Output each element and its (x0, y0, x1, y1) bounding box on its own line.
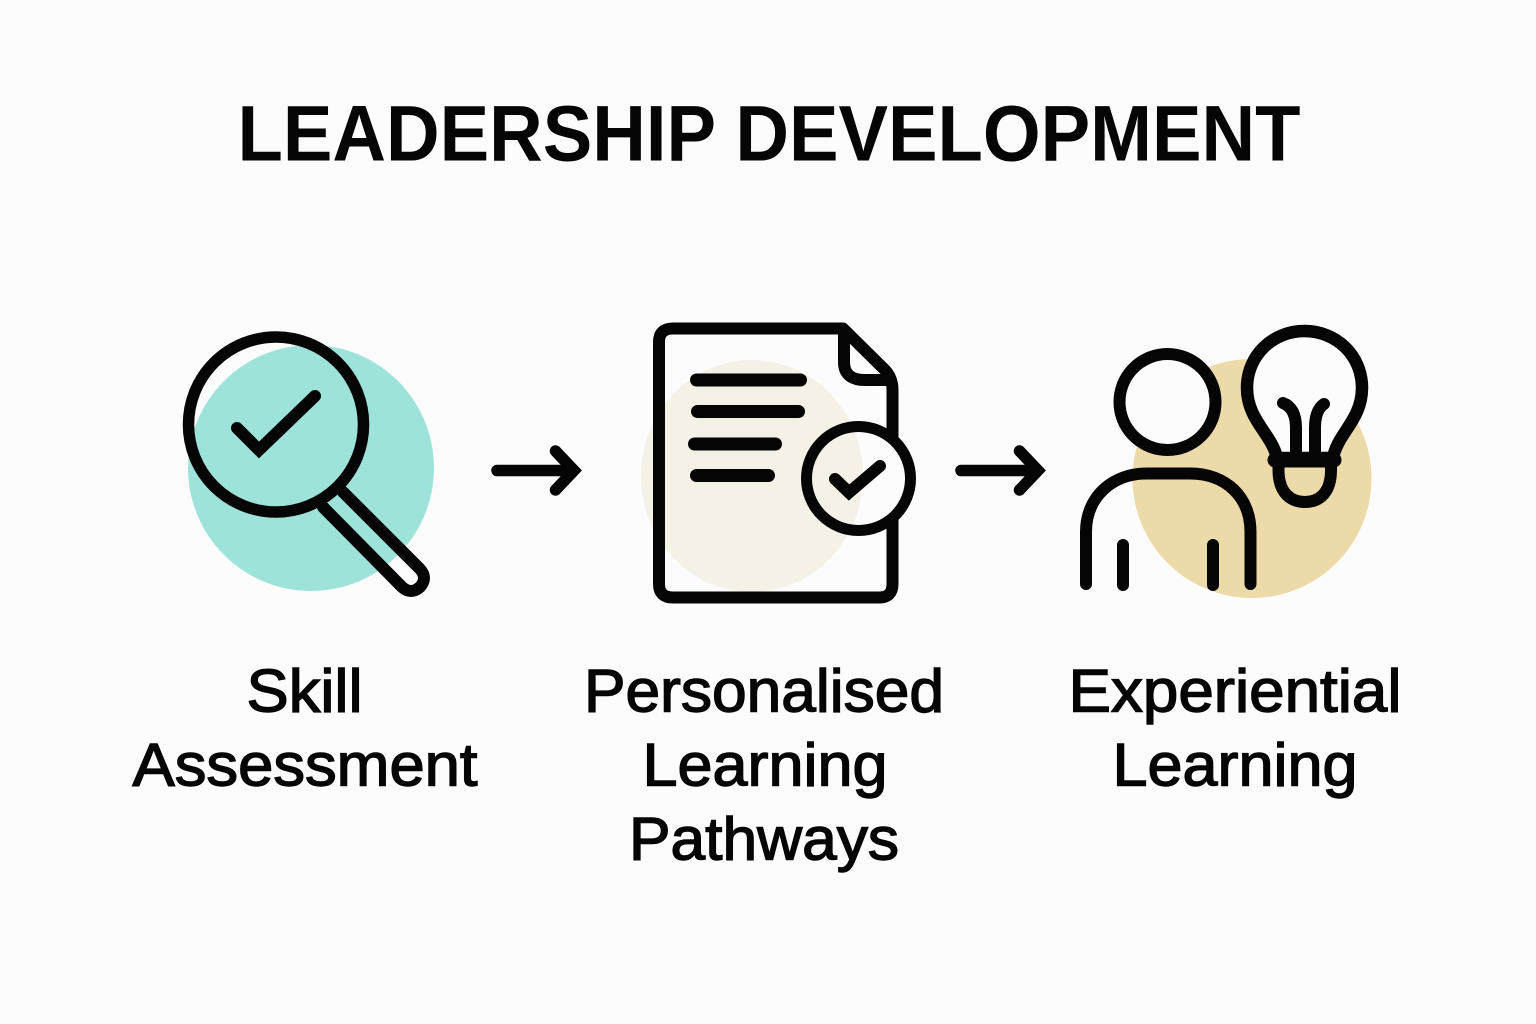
bulb glass (1247, 331, 1362, 458)
magnifier handle (323, 492, 424, 591)
label: experiential learning: Experiential (1068, 658, 1402, 724)
bulb filaments (1283, 403, 1324, 454)
teal background circle (188, 345, 434, 591)
label: personalised learning pathways: Learning (642, 732, 888, 798)
label: personalised learning pathways (584, 658, 944, 872)
label: skill assessment: Assessment (132, 732, 478, 798)
tan background circle (1132, 359, 1372, 598)
folded corner (844, 330, 890, 380)
document text lines (694, 380, 800, 476)
label: skill assessment: Skill (246, 658, 362, 724)
label: personalised learning pathways: Personalised (584, 658, 944, 724)
label: experiential learning: Learning (1112, 732, 1358, 798)
bulb collar (1275, 452, 1334, 468)
document outline (659, 328, 892, 598)
bulb base (1278, 462, 1331, 502)
title: LEADERSHIP DEVELOPMENT (238, 88, 1300, 178)
badge check mark (835, 466, 880, 492)
label: personalised learning pathways: Pathways (629, 806, 899, 872)
label: skill assessment (132, 658, 478, 798)
person arms (1123, 545, 1213, 585)
label: experiential learning (1068, 658, 1402, 798)
arrow: step two to step three (961, 451, 1038, 490)
person head (1120, 354, 1216, 450)
check badge ring (806, 426, 910, 530)
check mark (237, 396, 315, 450)
magnifier lens (188, 337, 364, 512)
icon: document with check badge (641, 328, 910, 598)
arrow: step one to step two (497, 451, 574, 490)
beige background circle (641, 360, 863, 592)
person shoulders (1086, 474, 1250, 584)
icon: person with lightbulb (1086, 331, 1372, 598)
icon: magnifying glass with checkmark (188, 337, 434, 591)
